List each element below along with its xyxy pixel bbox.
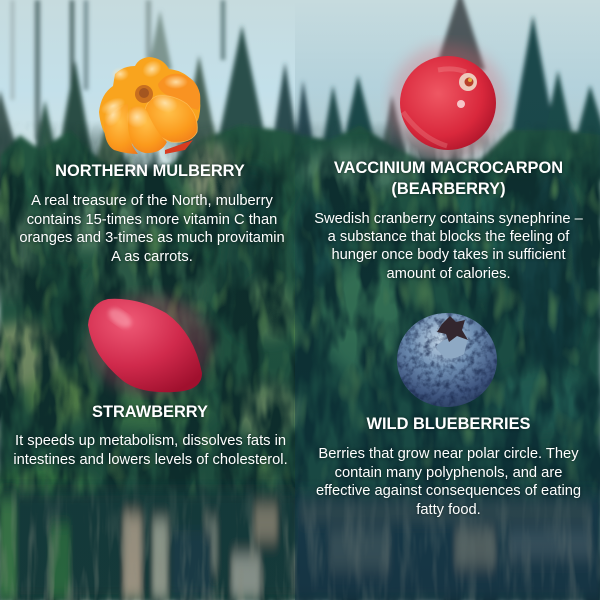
icon: northern mulberry [99, 57, 200, 154]
panel: northern mulberry [19, 57, 285, 265]
icon: blueberry [397, 313, 497, 407]
panel: bearberry [314, 38, 583, 282]
text: wild blueberries description [316, 446, 581, 518]
text: northern mulberry description: contains 15-times more vitamin C than [27, 212, 277, 228]
text: bearberry description [314, 211, 583, 282]
text: wild blueberries description: Berries that grow near polar circle. They [318, 446, 579, 462]
heading: vaccinium macrocarpon [334, 159, 564, 198]
text: bearberry description: amount of calories. [386, 266, 511, 282]
icon: strawberry [82, 288, 218, 400]
text: northern mulberry description: oranges and 3-times as much provitamin [19, 230, 285, 246]
text: northern mulberry description: A real treasure of the North, mulberry [31, 193, 273, 209]
text: bearberry description: a substance that blocks the feeling of [328, 229, 569, 245]
panel: wild blueberries [316, 313, 581, 518]
forest texture [0, 123, 600, 600]
text: bearberry description: Swedish cranberry contains synephrine – [314, 211, 583, 227]
heading: strawberry: STRAWBERRY [92, 403, 208, 421]
heading: vaccinium macrocarpon: VACCINIUM MACROCARPON [334, 159, 563, 177]
text: wild blueberries description: effective against consequences of eating [316, 483, 581, 499]
text: bearberry description: hunger once body takes in sufficient [331, 247, 566, 263]
text: strawberry description [13, 433, 288, 468]
icon: cranberry [386, 38, 510, 166]
panel: strawberry [13, 288, 288, 468]
text: wild blueberries description: fatty food. [416, 502, 481, 518]
heading: vaccinium macrocarpon: (BEARBERRY) [391, 180, 506, 198]
heading: wild blueberries: WILD BLUEBERRIES [367, 415, 530, 433]
text: northern mulberry description: A as carrots. [111, 249, 193, 265]
heading: northern mulberry: NORTHERN MULBERRY [55, 162, 245, 180]
text: strawberry description: It speeds up metabolism, dissolves fats in [15, 433, 286, 449]
text: wild blueberries description: contain many polyphenols, and are [335, 465, 562, 481]
text: northern mulberry description [19, 193, 285, 265]
cliff [0, 490, 600, 600]
text: strawberry description: intestines and lowers levels of cholesterol. [13, 452, 288, 468]
